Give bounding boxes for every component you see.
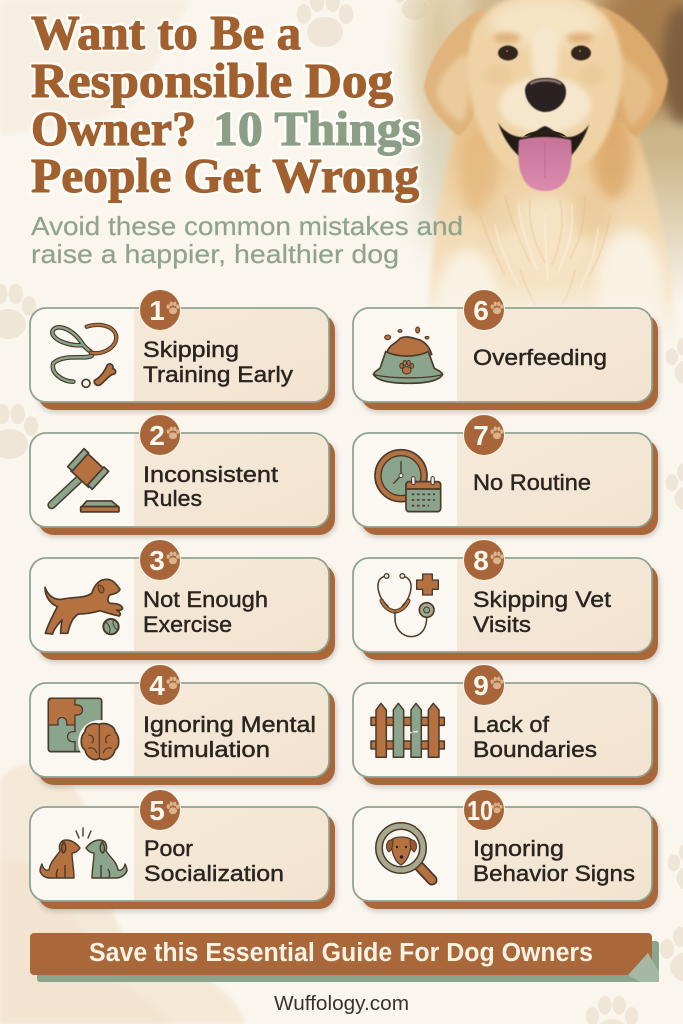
dog nose [525,78,566,124]
subtitle [31,211,463,269]
number badge [140,664,180,706]
label: Stimulation [143,737,270,762]
number badge [140,414,180,456]
title: 10 Things [213,101,421,156]
label [143,712,316,762]
dog head [468,0,622,178]
icon: puzzle and brain [48,698,122,764]
number badge: 7 [473,420,489,451]
label [143,587,268,637]
card 6: Overfeeding [353,290,659,412]
number badge: 2 [149,420,165,451]
label [144,836,284,886]
label: No Routine [473,470,591,495]
card 10: Ignoring Behavior Signs [353,790,659,911]
number badge [464,540,504,580]
number badge [140,290,180,330]
label: Not Enough [143,587,268,612]
label [473,712,597,762]
label: Rules [143,486,202,511]
card 8: Skipping Vet Visits [353,540,659,662]
number badge: 8 [473,545,489,576]
icon: wooden fence with gate [371,703,444,757]
number badge: 5 [149,795,165,826]
card 3: Not Enough Exercise [30,540,336,662]
number badge [464,664,504,706]
icon: running dog and ball [45,579,123,634]
dog ears [424,6,668,137]
card 9: Lack of Boundaries [353,664,659,787]
icon: overflowing dog bowl [373,327,443,383]
number badge: 9 [473,670,489,701]
number badge: 4 [149,670,165,701]
label [143,462,279,511]
icon: clock and calendar [375,450,441,512]
subtitle: raise a happier, healthier dog [31,239,399,269]
number badge [140,540,180,580]
label: Behavior Signs [473,861,635,886]
card 2: Inconsistent Rules [30,414,336,537]
number badge: 6 [473,295,489,326]
dog eyes [498,46,591,60]
icon: magnifying glass over dog face [379,826,432,880]
title: Want to Be a [31,5,301,60]
card 4: Ignoring Mental Stimulation [30,664,336,787]
call-to-action banner: Save this Essential Guide For Dog Owners [89,939,593,967]
website credit: Wuffology.com [274,993,409,1015]
icon: leash and treat [52,325,116,387]
title: Responsible Dog [31,53,394,108]
title [31,5,421,203]
label: Poor [144,836,194,861]
label: Training Early [143,362,294,387]
number badge [140,790,180,830]
number badge [464,790,504,830]
dog mouth [498,122,589,191]
number badge [464,290,504,330]
call-to-action banner [30,933,659,982]
label: Socialization [144,861,284,886]
title: Owner? [31,101,196,156]
number badge: 3 [149,545,165,576]
label: Skipping Vet [473,587,612,612]
label [473,587,612,637]
number badge: 1 [149,295,165,326]
icon: two dogs meeting [40,828,127,878]
label: Ignoring [473,836,564,861]
label: Visits [473,612,531,637]
number badge: 10 [467,795,493,826]
watercolor washes [0,0,245,1024]
title: People Get Wrong [31,148,419,203]
label: Boundaries [473,737,597,762]
icon: stethoscope and medical cross [378,574,438,637]
subtitle: Avoid these common mistakes and [31,211,463,241]
label: Lack of [473,712,550,737]
number badge [464,414,504,456]
label: Overfeeding [473,345,607,370]
label: Skipping [143,337,239,362]
dog body and chest [428,110,676,345]
card 5: Poor Socialization [30,790,336,911]
label: Inconsistent [143,462,279,487]
label [143,337,294,387]
card 1: Skipping Training Early [30,290,336,412]
label: Ignoring Mental [143,712,316,737]
card 7: No Routine [353,414,659,537]
label [473,836,635,886]
icon: gavel [52,449,119,512]
label: Exercise [143,612,232,637]
golden retriever photo [424,0,676,345]
photo backdrop behind dog [412,0,683,300]
